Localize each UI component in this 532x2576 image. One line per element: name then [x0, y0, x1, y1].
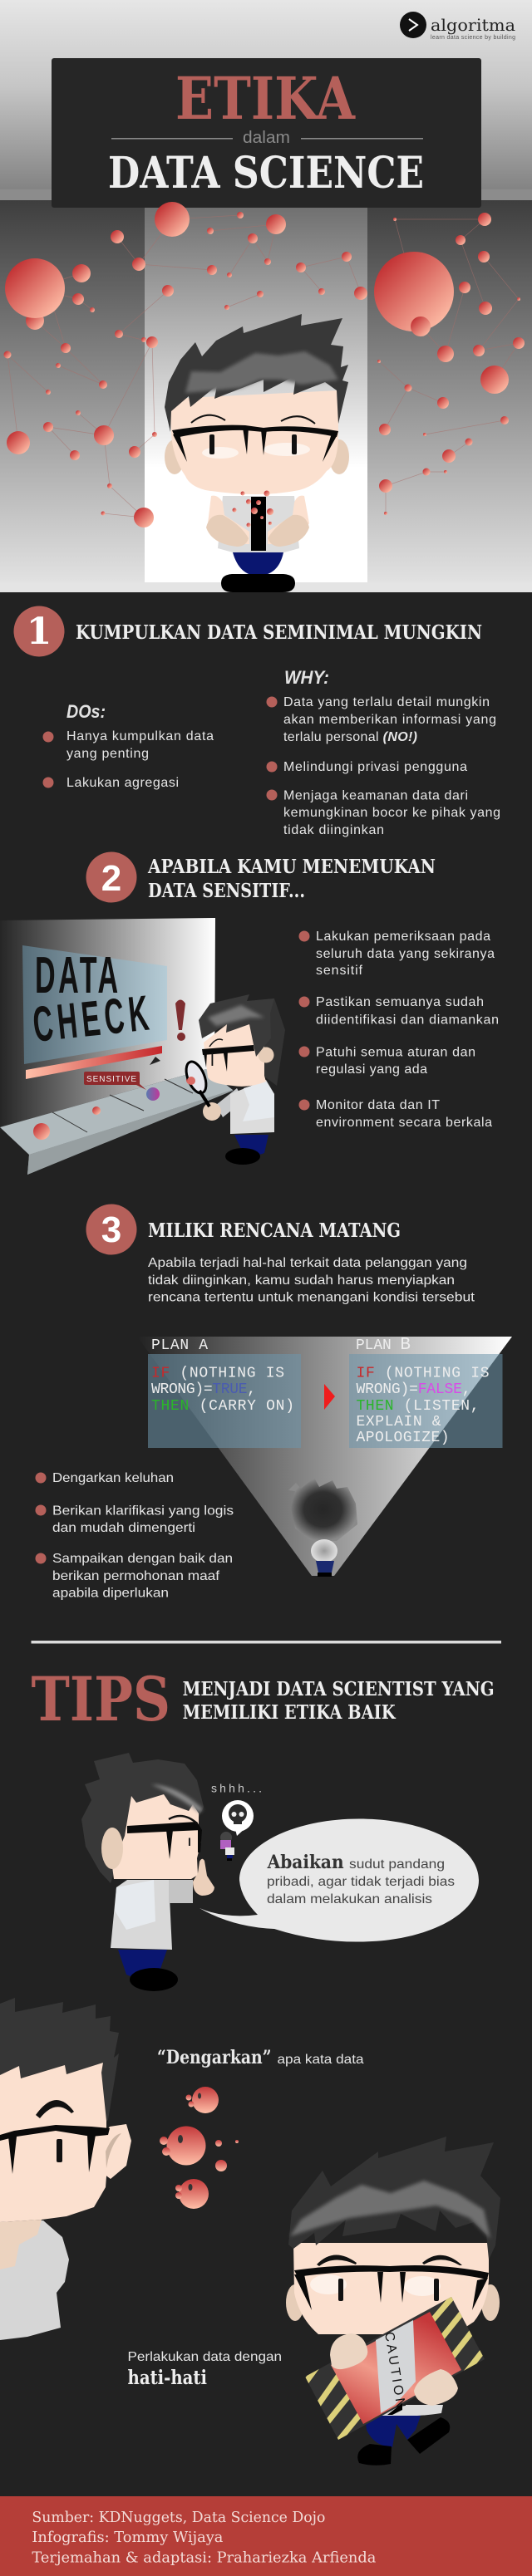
- bullet list 2: seluruh data yang sekiranya: [316, 947, 495, 961]
- plan A box: THEN (CARRY ON): [151, 1398, 294, 1415]
- plan B box: WRONG)=FALSE,: [356, 1381, 470, 1398]
- bullet list 3: Berikan klarifikasi yang logis: [52, 1504, 234, 1519]
- text: shhh: shhh...: [211, 1781, 262, 1794]
- bullet list 2: diidentifikasi dan diamankan: [316, 1013, 499, 1027]
- number badge 1: [13, 606, 65, 656]
- plan B box: THEN (LISTEN,: [356, 1398, 479, 1415]
- footer: Sumber: KDNuggets, Data Science Dojo: [32, 2509, 325, 2526]
- WHY list: WHY:: [284, 667, 329, 688]
- screen: data check: CHECK: [30, 985, 155, 1053]
- WHY list: [266, 667, 500, 837]
- heading 2: [147, 856, 436, 902]
- bullet list 2: Lakukan pemeriksaan pada: [316, 930, 490, 944]
- paragraph: rencana tertentu untuk menangani kondisi tersebut: [148, 1291, 475, 1304]
- plan A box: PLAN A: [151, 1337, 208, 1354]
- character: shh: I: [188, 1835, 191, 1848]
- text: dengarkan: “Dengarkan”: [157, 2047, 271, 2068]
- plan B box: PLAN B: [356, 1336, 411, 1355]
- WHY list: akan memberikan informasi yang: [283, 713, 496, 727]
- caution data card: [303, 2294, 485, 2443]
- label: sensitive: [84, 1072, 146, 1090]
- plan A box: WRONG)=TRUE,: [151, 1381, 256, 1398]
- character: with magnifier: [182, 994, 285, 1165]
- speech bubble: sudut pandang: [349, 1857, 445, 1872]
- bullet list 3: [35, 1471, 234, 1600]
- heading 2: DATA SENSITIF...: [148, 880, 305, 902]
- bullet list 3: Sampaikan dengan baik dan: [52, 1552, 233, 1566]
- footer: [0, 2496, 532, 2576]
- speech bubble: Abaikan: [267, 1852, 344, 1873]
- label: sensitive: SENSITIVE: [86, 1075, 136, 1084]
- paragraph: Apabila terjadi hal-hal terkait data pelanggan yang: [148, 1256, 467, 1270]
- spotlight: [137, 1337, 512, 1576]
- heading: tips subtitle: [183, 1678, 495, 1724]
- title: dalam: dalam: [243, 129, 290, 147]
- DOs list: [43, 701, 214, 790]
- number badge 1: 1: [27, 611, 52, 653]
- bullet list 2: Pastikan semuanya sudah: [316, 995, 484, 1009]
- bullet list 3: Dengarkan keluhan: [52, 1471, 174, 1485]
- DOs list: Lakukan agregasi: [66, 776, 179, 790]
- speech bubble: dalam melakukan analisis: [267, 1892, 432, 1906]
- WHY list: terlalu personal (NO!): [283, 730, 417, 744]
- text: dengarkan: [157, 2047, 364, 2068]
- character: big head listening: [0, 1998, 131, 2340]
- network of data bubbles: [3, 202, 525, 527]
- plan B box: [349, 1336, 502, 1448]
- WHY list: tidak diinginkan: [283, 823, 384, 837]
- text: hati-hati: [128, 2350, 282, 2389]
- screen: data check: [22, 945, 167, 1064]
- panel: header: [0, 0, 532, 592]
- bullet list 2: sensitif: [316, 964, 363, 978]
- heading: tips subtitle: MEMILIKI ETIKA BAIK: [183, 1701, 396, 1724]
- DOs list: Hanya kumpulkan data: [66, 729, 214, 743]
- heading: TIPS: TIPS: [32, 1664, 170, 1735]
- paragraph: tidak diinginkan, kamu sudah harus menyiapkan: [148, 1273, 455, 1288]
- bullet list 3: berikan permohonan maaf: [52, 1569, 220, 1583]
- character: from behind: [288, 1478, 357, 1577]
- illustration: data check: [0, 918, 285, 1175]
- character: front view with phone: [165, 314, 349, 592]
- footer: Terjemahan & adaptasi: Prahariezka Arfienda: [32, 2549, 377, 2567]
- plan B box: EXPLAIN &: [356, 1414, 441, 1430]
- number badge 3: 3: [101, 1209, 121, 1250]
- bullet list 2: Patuhi semua aturan dan: [316, 1045, 475, 1060]
- WHY list: kemungkinan bocor ke pihak yang: [283, 806, 500, 820]
- section 2: [0, 852, 499, 1175]
- logo: algoritma: algoritma: [431, 15, 515, 35]
- bullet list 2: [299, 930, 499, 1130]
- title: ETIKA: ETIKA: [175, 64, 356, 133]
- heading 2: APABILA KAMU MENEMUKAN: [147, 856, 436, 878]
- paragraph: [148, 1256, 475, 1304]
- WHY list: Menjaga keamanan data dari: [283, 789, 468, 802]
- icon: exclamation mark: [175, 1000, 185, 1041]
- character: holding caution data: [286, 2137, 500, 2466]
- DOs list: yang penting: [66, 747, 149, 761]
- icon: data fish bubbles: [160, 2087, 239, 2209]
- plan A box: IF (NOTHING IS: [151, 1366, 284, 1382]
- arrow: [324, 1384, 335, 1410]
- plan B box: IF (NOTHING IS: [356, 1366, 489, 1382]
- section: tips: [0, 1664, 500, 2466]
- section 3: [35, 1205, 512, 1600]
- number badge 2: [86, 852, 136, 902]
- section 1: [13, 606, 500, 837]
- bullet list 2: Monitor data dan IT: [316, 1098, 440, 1112]
- speech bubble: [200, 1819, 479, 1942]
- icon: skull bubble: [222, 1800, 254, 1836]
- DOs list: DOs:: [66, 701, 106, 722]
- text: hati-hati: hati-hati: [128, 2367, 207, 2389]
- footer: Infografis: Tommy Wijaya: [32, 2529, 224, 2546]
- plan A box: [148, 1337, 301, 1448]
- bullet list 2: environment secara berkala: [316, 1116, 492, 1130]
- icon: tiny character: [220, 1832, 234, 1861]
- plan B box: APOLOGIZE): [356, 1430, 449, 1446]
- character: shh: [81, 1753, 214, 1991]
- caution data card: CAUTION: [382, 2331, 407, 2408]
- bullet list 2: regulasi yang ada: [316, 1062, 427, 1077]
- logo: algoritma: learn data science by building: [431, 35, 515, 41]
- number badge 3: [86, 1205, 136, 1254]
- heading 3: MILIKI RENCANA MATANG: [148, 1219, 401, 1242]
- number badge 2: 2: [101, 858, 121, 899]
- logo: algoritma: [400, 12, 515, 41]
- text: hati-hati: Perlakukan data dengan: [128, 2350, 282, 2364]
- WHY list: Melindungi privasi pengguna: [283, 760, 467, 774]
- text: dengarkan: apa kata data: [278, 2053, 364, 2067]
- WHY list: Data yang terlalu detail mungkin: [283, 695, 490, 709]
- speech bubble: pribadi, agar tidak terjadi bias: [267, 1875, 455, 1889]
- screen: data check: DATA: [35, 946, 121, 1004]
- bullet list 3: apabila diperlukan: [52, 1587, 169, 1600]
- bullet list 3: dan mudah dimengerti: [52, 1521, 195, 1535]
- title panel: [52, 58, 481, 208]
- title: DATA SCIENCE: DATA SCIENCE: [108, 148, 424, 199]
